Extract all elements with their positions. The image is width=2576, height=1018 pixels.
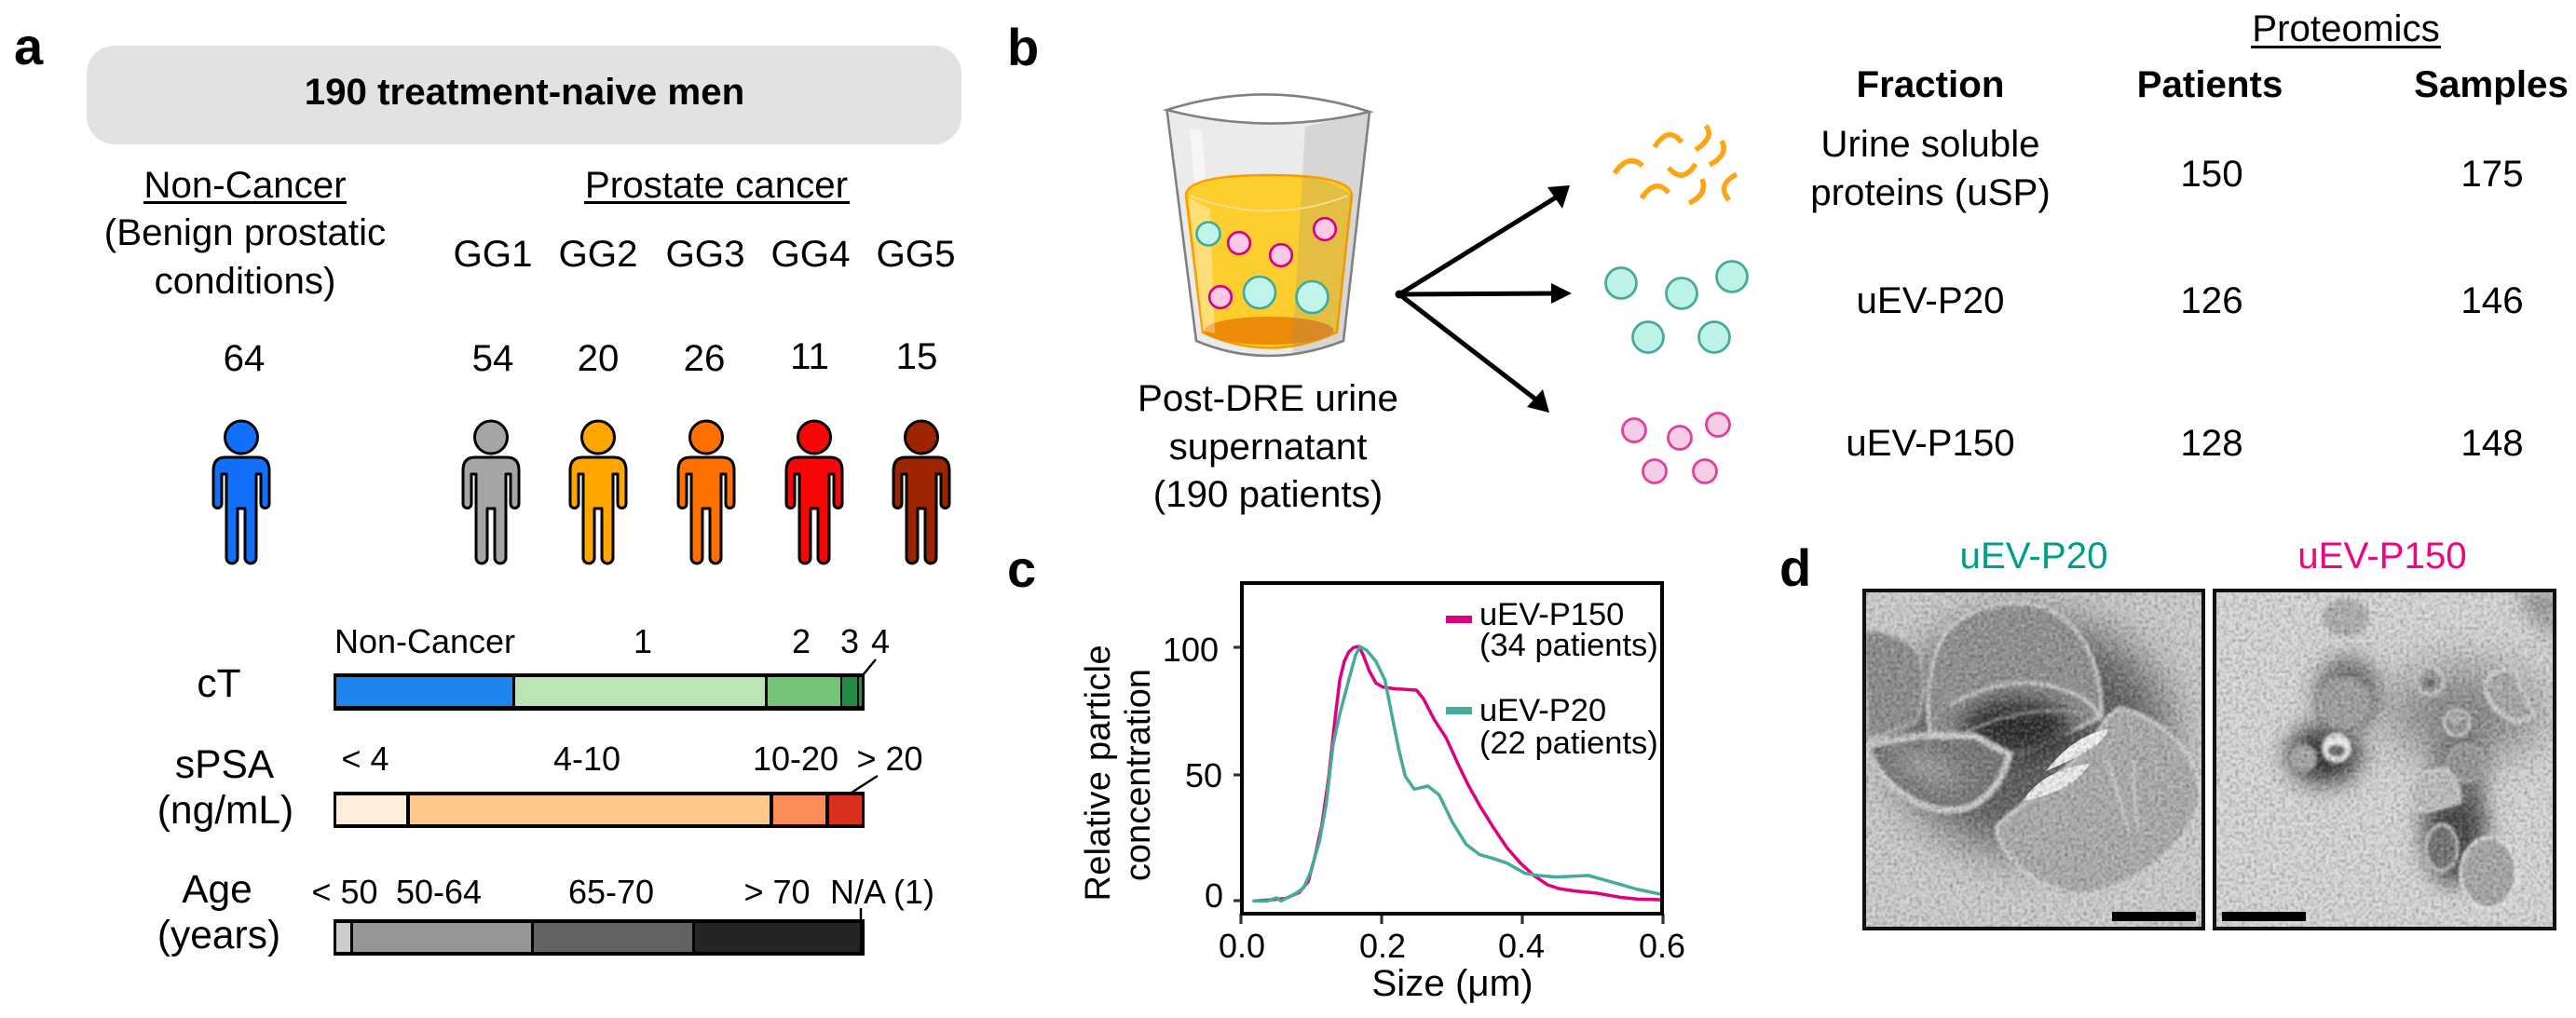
size distribution line chart: 50	[1185, 756, 1222, 794]
Age stacked bar: (years)	[157, 914, 280, 957]
heading pill: 190 treatment-naive men: 190 treatment-naive men	[305, 71, 744, 113]
grade group labels	[453, 233, 956, 275]
panel c: particle size distribution	[1007, 539, 1685, 1004]
size distribution line chart: Size (μm)	[1371, 962, 1533, 1004]
heading pill: 190 treatment-naive men	[87, 46, 961, 144]
cT stacked bar: Non-Cancer	[334, 622, 515, 660]
Age stacked bar: 65-70	[568, 873, 654, 911]
sPSA stacked bar: > 20	[856, 740, 923, 778]
Age stacked bar	[157, 868, 934, 957]
scale bar	[2222, 912, 2306, 921]
cT stacked bar: 1	[634, 622, 652, 660]
glass caption: supernatant	[1169, 426, 1367, 468]
size distribution line chart: 0	[1205, 876, 1223, 915]
sPSA stacked bar: 4-10	[553, 740, 620, 778]
proteomics table: uEV-P150	[1846, 422, 2015, 464]
sPSA stacked bar: 10-20	[753, 740, 838, 778]
patient counts: 20	[578, 337, 619, 379]
prostate cancer group heading: Prostate cancer	[585, 164, 848, 206]
icon: person GG4 red	[786, 421, 842, 563]
proteomics table: 128	[2180, 422, 2243, 464]
Age stacked bar: N/A (1)	[830, 873, 934, 911]
cT stacked bar: cT	[197, 662, 241, 706]
chart legend: (34 patients)	[1479, 628, 1658, 663]
scale bar	[2112, 912, 2196, 921]
cT stacked bar: 3	[840, 622, 859, 660]
size distribution line chart: 0.0	[1219, 927, 1265, 965]
proteomics table	[1810, 7, 2569, 464]
patient counts: 64	[224, 337, 265, 379]
micrograph: uEV-P150	[2215, 590, 2555, 929]
sPSA stacked bar: < 4	[341, 740, 389, 778]
micrograph: uEV-P20	[1864, 590, 2203, 929]
cT stacked bar: 2	[792, 622, 811, 660]
arrow: to uEV-P20	[1399, 283, 1572, 304]
panel letter c: c	[1007, 539, 1036, 598]
icon: uEV-P150 small vesicles	[1623, 414, 1729, 482]
icon: person GG2 amber	[570, 421, 626, 563]
proteomics table: Samples	[2414, 63, 2569, 105]
Age stacked bar: 50-64	[396, 873, 482, 911]
icon: uEV-P20 large vesicles	[1606, 261, 1748, 352]
icon: glass of urine with vesicles	[1166, 94, 1370, 356]
sPSA stacked bar	[157, 740, 923, 833]
panel letter b: b	[1007, 18, 1039, 76]
icon: person non-cancer blue	[213, 421, 269, 563]
micrograph heading uEV-P150: uEV-P150	[2297, 535, 2467, 577]
non-cancer group heading: Non-Cancer	[143, 164, 347, 206]
cT stacked bar	[197, 622, 890, 711]
panel d: electron micrographs	[1779, 535, 2555, 929]
glass caption: Post-DRE urine	[1138, 377, 1398, 419]
arrow: to soluble proteins	[1396, 185, 1570, 298]
grade group labels: GG4	[770, 233, 851, 275]
sPSA stacked bar: sPSA	[175, 743, 275, 787]
panel a: cohort overview	[14, 17, 961, 957]
icon: person GG5 dark red	[893, 421, 949, 563]
chart legend: uEV-P150	[1479, 597, 1624, 632]
chart legend: uEV-P20	[1479, 693, 1606, 728]
cT stacked bar: 4	[871, 622, 890, 660]
proteomics table: Fraction	[1857, 63, 2004, 105]
panel letter a: a	[14, 17, 44, 75]
size distribution line chart	[1163, 583, 1685, 1004]
patient counts: 26	[684, 337, 725, 379]
y axis title: concentration	[1119, 669, 1158, 881]
proteomics table: 146	[2460, 279, 2524, 321]
chart legend: (22 patients)	[1479, 726, 1658, 761]
y axis title	[1079, 645, 1158, 902]
grade group labels: GG1	[453, 233, 533, 275]
grade group labels: GG5	[876, 233, 956, 275]
proteomics table: 150	[2180, 153, 2243, 195]
non-cancer group heading: conditions)	[155, 260, 335, 302]
glass caption: (190 patients)	[1153, 473, 1383, 515]
non-cancer group heading	[104, 164, 386, 302]
patient counts: 11	[790, 335, 829, 377]
proteomics table: Proteomics	[2252, 7, 2440, 49]
proteomics table: Patients	[2137, 63, 2283, 105]
Age stacked bar: < 50	[311, 873, 378, 911]
proteomics table: uEV-P20	[1856, 279, 2005, 321]
grade group labels: GG2	[558, 233, 638, 275]
proteomics table: 175	[2460, 153, 2524, 195]
chart legend	[1446, 597, 1658, 761]
proteomics table: Urine soluble	[1820, 123, 2040, 165]
micrograph heading uEV-P20: uEV-P20	[1959, 535, 2108, 577]
patient counts: 15	[896, 335, 937, 377]
icon: soluble proteins squiggles	[1615, 126, 1737, 203]
non-cancer group heading: (Benign prostatic	[104, 211, 386, 253]
size distribution line chart: 0.2	[1359, 927, 1406, 965]
proteomics table: proteins (uSP)	[1810, 171, 2051, 213]
arrow: to uEV-P150	[1399, 294, 1549, 413]
sPSA stacked bar: (ng/mL)	[157, 789, 293, 833]
patient counts: 54	[472, 337, 513, 379]
icon: person GG3 orange	[678, 421, 734, 563]
patient counts	[224, 335, 937, 379]
size distribution line chart: 100	[1163, 631, 1219, 669]
y axis title: Relative particle	[1079, 645, 1118, 902]
size distribution line chart: 0.6	[1639, 927, 1685, 965]
panel b: fractionation	[1007, 7, 2569, 515]
size distribution line chart: 0.4	[1498, 927, 1545, 965]
proteomics table: 126	[2180, 279, 2243, 321]
Age stacked bar: > 70	[743, 873, 811, 911]
Age stacked bar: Age	[182, 868, 252, 912]
proteomics table: 148	[2460, 422, 2524, 464]
panel letter d: d	[1779, 538, 1811, 597]
glass caption	[1138, 377, 1398, 515]
grade group labels: GG3	[665, 233, 745, 275]
icon: person GG1 grey	[463, 421, 519, 563]
